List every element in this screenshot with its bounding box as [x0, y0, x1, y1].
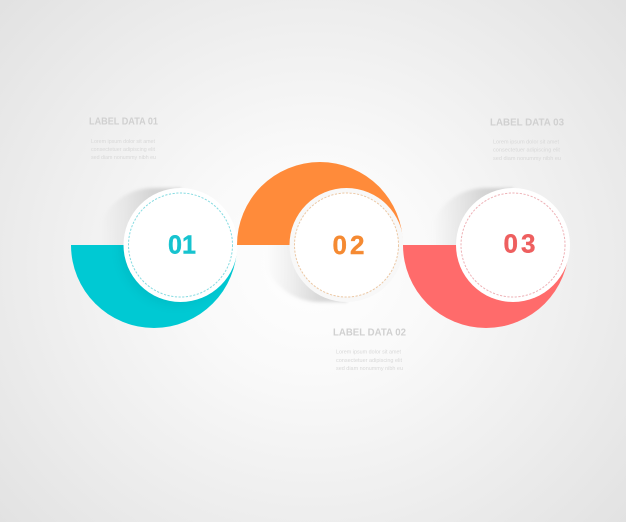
- half disc: coral: [403, 245, 569, 328]
- circle: step 02: [290, 188, 404, 302]
- body text: label 02: sed diam nonummy nibh eu: [336, 366, 403, 372]
- panel: step 01: [71, 188, 238, 328]
- half disc: orange: [237, 162, 403, 245]
- shadow: step 02: [280, 245, 347, 304]
- text block: label 02: [333, 328, 406, 372]
- body text: label 01: [91, 139, 156, 161]
- circle: step 01: [124, 188, 238, 302]
- number 01: 01: [168, 230, 196, 260]
- half disc: teal: [71, 245, 237, 328]
- body text: label 01: Lorem ipsum dolor sit amet: [91, 139, 156, 145]
- inner shadow: teal: [122, 245, 180, 302]
- panel: step 02: [237, 162, 404, 302]
- dashed ring: step 03: [461, 193, 565, 297]
- number 02: 02: [332, 230, 364, 260]
- body text: label 02: consectetuer adipiscing elit: [336, 358, 403, 364]
- heading: label 01: LABEL DATA 01: [89, 116, 158, 128]
- body text: label 01: sed diam nonummy nibh eu: [91, 155, 156, 161]
- heading: label 02: LABEL DATA 02: [333, 328, 406, 338]
- body text: label 03: consectetuer adipiscing elit: [493, 148, 561, 154]
- shadow: step 01: [117, 186, 181, 245]
- shadow: step 03: [448, 187, 513, 245]
- dashed ring: step 01: [128, 193, 232, 297]
- body text: label 03: sed diam nonummy nibh eu: [493, 156, 561, 162]
- body text: label 02: [336, 350, 403, 372]
- body text: label 02: Lorem ipsum dolor sit amet: [336, 350, 402, 356]
- circle: step 03: [456, 188, 570, 302]
- number 03: 03: [504, 228, 536, 258]
- body text: label 01: consectetuer adipiscing elit: [91, 147, 156, 153]
- panel: step 03: [403, 188, 570, 328]
- text block: label 03: [490, 118, 564, 162]
- inner white: step 02: [294, 193, 398, 297]
- dashed ring: step 02: [294, 193, 398, 297]
- heading: label 03: LABEL DATA 03: [490, 118, 564, 128]
- body text: label 03: [493, 140, 561, 162]
- body text: label 03: Lorem ipsum dolor sit amet: [493, 140, 560, 146]
- text block: label 01: [89, 116, 158, 161]
